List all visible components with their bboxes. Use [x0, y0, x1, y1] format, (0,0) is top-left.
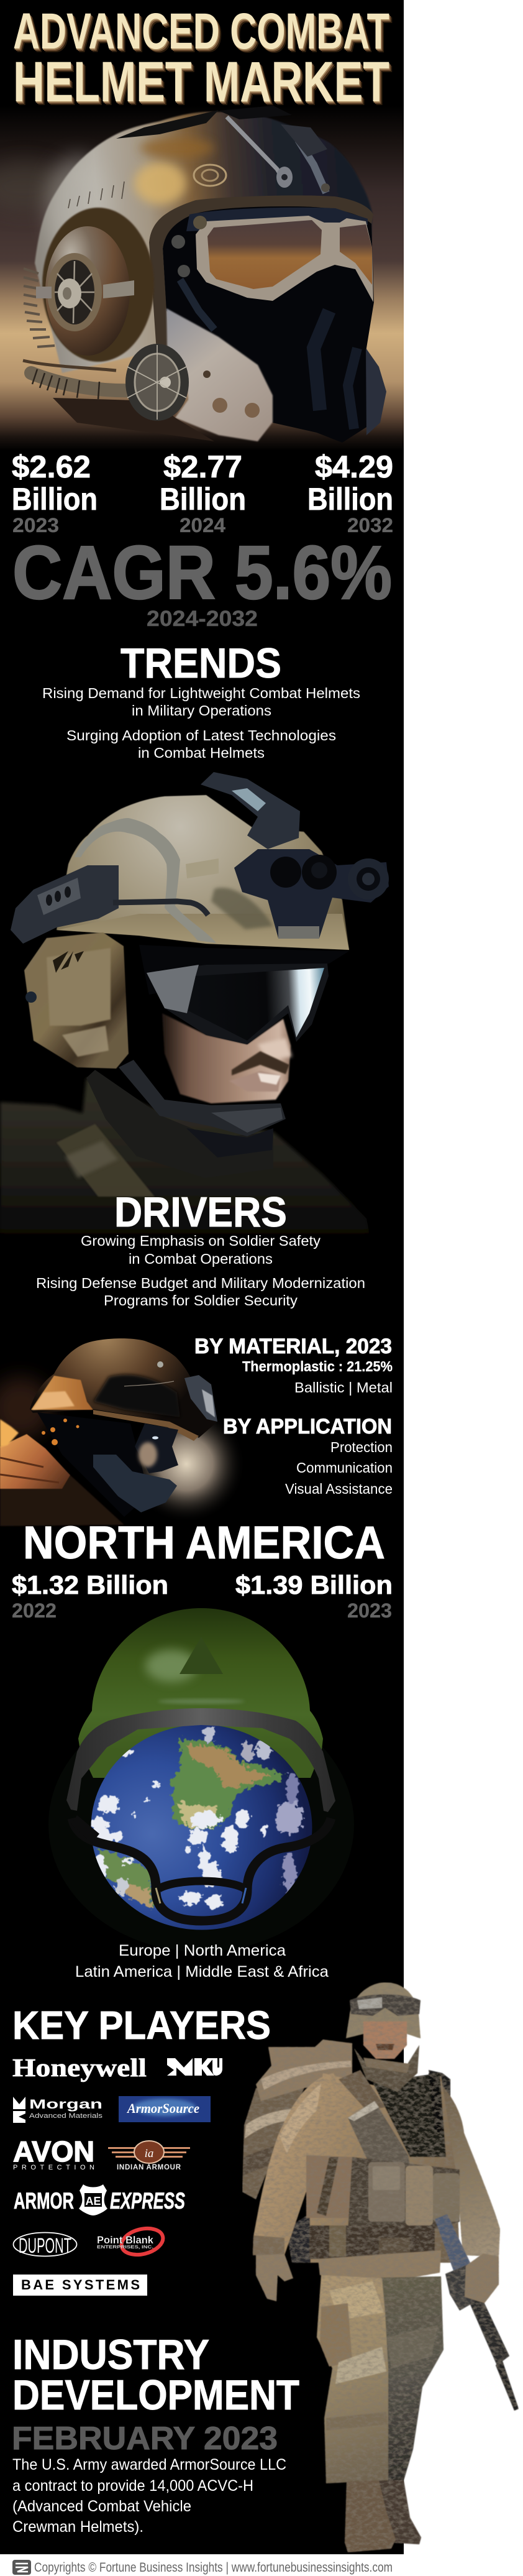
stat: 2024 market size: [160, 449, 246, 536]
logo: Armor Express: [14, 2184, 185, 2215]
section: drivers: [36, 1189, 365, 1309]
section: key players: KEY PLAYERS: [12, 2003, 271, 2048]
stat: 2024 market size: 2024: [180, 514, 225, 536]
stat: 2023 market size: [12, 449, 98, 536]
stat: 2032 market size: $4.29: [315, 449, 393, 484]
logo: Avon Protection: AVON: [13, 2135, 94, 2168]
section: north america: 2022: [12, 1599, 57, 1622]
logo: BAE Systems: [13, 2275, 147, 2296]
section: industry development: Crewman Helmets).: [12, 2518, 143, 2536]
section: trends: Surging Adoption of Latest Technologies: [66, 727, 336, 743]
regions list: Latin America | Middle East & Africa: [75, 1963, 329, 1980]
logo: Point Blank: ENTERPRISES, INC.: [97, 2244, 153, 2250]
stat: CAGR: CAGR 5.6%: [12, 530, 392, 615]
title: advanced combat helmet market: HELMET MARKET: [13, 50, 389, 114]
segment: by application: Communication: [296, 1460, 393, 1476]
logo: Point Blank: Point Blank: [97, 2234, 154, 2246]
stat: CAGR: 2024-2032: [147, 607, 258, 631]
segment: by application: Protection: [330, 1439, 393, 1455]
logo: Morgan Advanced Materials: Advanced Materials: [29, 2112, 103, 2120]
logo: Armor Express: AE: [86, 2195, 101, 2207]
section: trends: Rising Demand for Lightweight Combat Helmets: [42, 685, 360, 701]
logo: DuPont: DUPONT: [19, 2234, 71, 2258]
illustration: soldier with night vision helmet: [0, 772, 389, 1249]
logo: ArmorSource: [119, 2096, 211, 2122]
section: trends: TRENDS: [121, 640, 281, 687]
section: industry development: FEBRUARY 2023: [12, 2421, 278, 2457]
section: north america: NORTH AMERICA: [23, 1517, 385, 1568]
section: drivers: Programs for Soldier Security: [104, 1292, 298, 1309]
section: drivers: Growing Emphasis on Soldier Safety: [81, 1233, 321, 1249]
segment: by material: Thermoplastic : 21.25%: [242, 1358, 393, 1374]
logo: Avon Protection: PROTECTION: [13, 2164, 94, 2171]
stat: 2023 market size: 2023: [12, 514, 59, 536]
section: trends: in Combat Helmets: [138, 745, 265, 761]
regions list: Europe | North America: [119, 1942, 286, 1959]
logo: ArmorSource: ArmorSource: [126, 2100, 199, 2116]
stat: 2032 market size: Billion: [307, 482, 393, 517]
footer: copyright: Copyrights © Fortune Business Insights | www.fortunebusinessinsights.com: [34, 2560, 393, 2575]
black page panel: [0, 0, 404, 2554]
section: industry development: The U.S. Army awarded ArmorSource LLC: [12, 2456, 286, 2473]
segment: by application: Visual Assistance: [285, 1481, 393, 1497]
logo: Indian Armour: ia: [145, 2147, 153, 2160]
illustration: soldier in flames: [0, 1338, 245, 1526]
section: industry development: INDUSTRY: [12, 2331, 209, 2378]
section: north america: $1.39 Billion: [235, 1570, 393, 1599]
logo: BAE Systems: BAE SYSTEMS: [21, 2277, 140, 2293]
logo: Point Blank: [97, 2224, 166, 2259]
illustration: globe wearing green helmet: [66, 1608, 335, 1930]
section: industry development: (Advanced Combat Vehicle: [12, 2498, 191, 2515]
logo: Morgan Advanced Materials: Morgan: [29, 2097, 102, 2112]
logo: Morgan Advanced Materials: [13, 2097, 103, 2123]
stat: 2024 market size: Billion: [160, 482, 246, 517]
segment: by material: BY MATERIAL, 2023: [194, 1335, 392, 1358]
logo: Honeywell: Honeywell: [12, 2053, 147, 2082]
segment: by application: [223, 1415, 393, 1497]
logo: Armor Express: EXPRESS: [110, 2188, 185, 2214]
logo: Indian Armour: [108, 2141, 190, 2171]
stat: 2032 market size: [307, 449, 393, 536]
section: industry development: [12, 2331, 299, 2536]
stat: 2032 market size: 2032: [347, 514, 393, 536]
stat: 2023 market size: Billion: [12, 482, 98, 517]
illustration: walking soldier: [242, 1982, 519, 2552]
logo: MKU: [167, 2058, 222, 2076]
segment: by material: [194, 1335, 393, 1396]
logo: Armor Express: ARMOR: [14, 2188, 74, 2214]
title: advanced combat helmet market: ADVANCED COMBAT: [13, 3, 389, 60]
segment: by material: Ballistic | Metal: [294, 1379, 393, 1396]
regions list: [75, 1942, 329, 1980]
logo: Indian Armour: INDIAN ARMOUR: [117, 2164, 181, 2171]
section: north america: [12, 1517, 393, 1622]
title: advanced combat helmet market: [13, 3, 389, 114]
section: industry development: a contract to provide 14,000 ACVC-H: [12, 2477, 253, 2495]
stat: 2023 market size: $2.62: [12, 449, 91, 484]
section: trends: [42, 640, 360, 761]
section: drivers: Rising Defense Budget and Military Modernization: [36, 1275, 365, 1291]
illustration: bronze combat helmet: [0, 106, 404, 451]
section: drivers: DRIVERS: [114, 1189, 287, 1236]
logo: DuPont: [14, 2233, 77, 2258]
section: trends: in Military Operations: [132, 702, 271, 719]
section: north america: 2023: [347, 1599, 392, 1622]
section: north america: $1.32 Billion: [12, 1570, 168, 1599]
stat: 2024 market size: $2.77: [163, 449, 242, 484]
section: drivers: in Combat Operations: [129, 1251, 273, 1267]
segment: by application: BY APPLICATION: [223, 1415, 392, 1438]
section: industry development: DEVELOPMENT: [12, 2371, 299, 2419]
